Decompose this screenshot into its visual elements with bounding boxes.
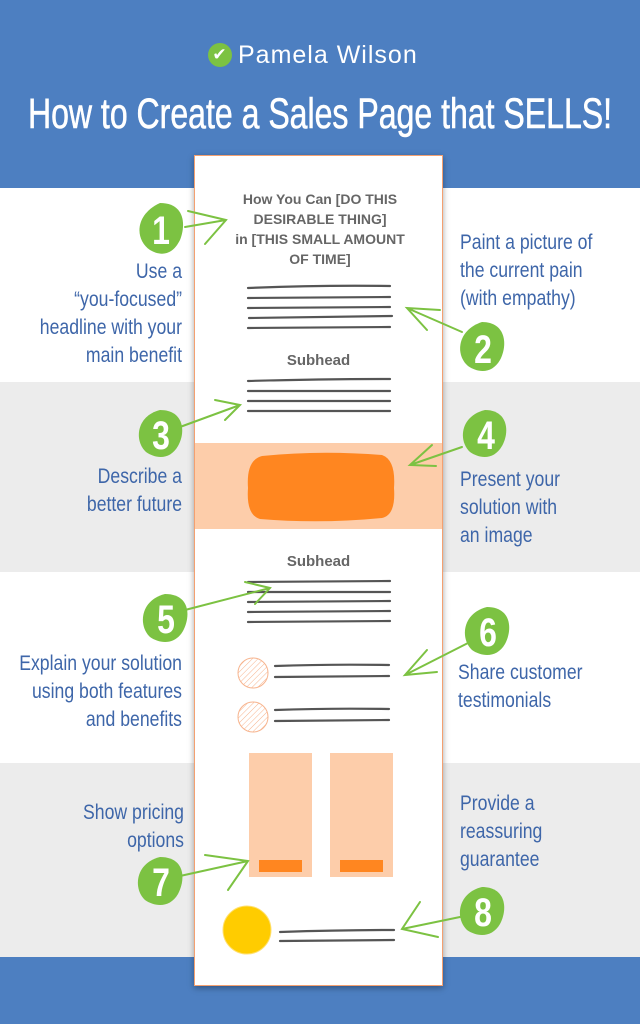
drawings: 7 (152, 860, 170, 905)
step 8 text (460, 792, 542, 871)
step 5 text: and benefits (86, 708, 182, 731)
step 6 text: Share customer (458, 661, 583, 684)
step 5 text (19, 652, 182, 731)
headline text: in [THIS SMALL AMOUNT (235, 231, 405, 247)
headline text: DESIRABLE THING] (254, 211, 386, 227)
panel: sales page mockup (194, 155, 443, 986)
step 6 text (458, 661, 583, 712)
step 6 text: testimonials (458, 689, 551, 712)
logo: ✔ (212, 45, 228, 64)
drawings: 1 (152, 208, 170, 253)
step 8 text: reassuring (460, 820, 542, 843)
step 5 text: using both features (32, 680, 182, 703)
step 1 text: Use a (136, 260, 182, 283)
step 1 text: “you-focused” (74, 288, 182, 311)
step 4 text: Present your (460, 468, 560, 491)
subhead 2: Subhead (287, 553, 350, 570)
step 3 text: better future (87, 493, 182, 516)
headline text: OF TIME] (289, 251, 351, 267)
drawings: 3 (152, 413, 170, 458)
image blob (248, 453, 394, 521)
headline text: How You Can [DO THIS (243, 191, 397, 207)
drawings: 4 (477, 413, 495, 458)
pricing boxes (249, 753, 312, 877)
subhead 1: Subhead (287, 352, 350, 369)
title: How to Create a Sales Page that SELLS! (28, 90, 612, 138)
step 1 text: headline with your (40, 316, 182, 339)
headline text (235, 191, 405, 267)
step 8 text: Provide a (460, 792, 535, 815)
step 7 text: options (127, 829, 184, 852)
step 4 text: solution with (460, 496, 557, 519)
step 8 text: guarantee (460, 848, 539, 871)
step 3 text (87, 465, 182, 516)
step 1 text (40, 260, 182, 367)
step 5 text: Explain your solution (19, 652, 182, 675)
drawings: 5 (157, 597, 175, 642)
step 2 text (460, 231, 592, 310)
drawings: 8 (474, 890, 492, 935)
step 2 text: (with empathy) (460, 287, 576, 310)
step 1 text: main benefit (86, 344, 182, 367)
logo: Pamela Wilson (238, 41, 418, 69)
solution image band (195, 443, 442, 529)
drawings: 2 (474, 327, 492, 372)
step 4 text (460, 468, 560, 547)
step 7 text: Show pricing (83, 801, 184, 824)
step 2 text: Paint a picture of (460, 231, 592, 254)
step 7 text (83, 801, 184, 852)
step 2 text: the current pain (460, 259, 583, 282)
step 4 text: an image (460, 524, 533, 547)
step 3 text: Describe a (98, 465, 182, 488)
drawings: 6 (479, 610, 497, 655)
